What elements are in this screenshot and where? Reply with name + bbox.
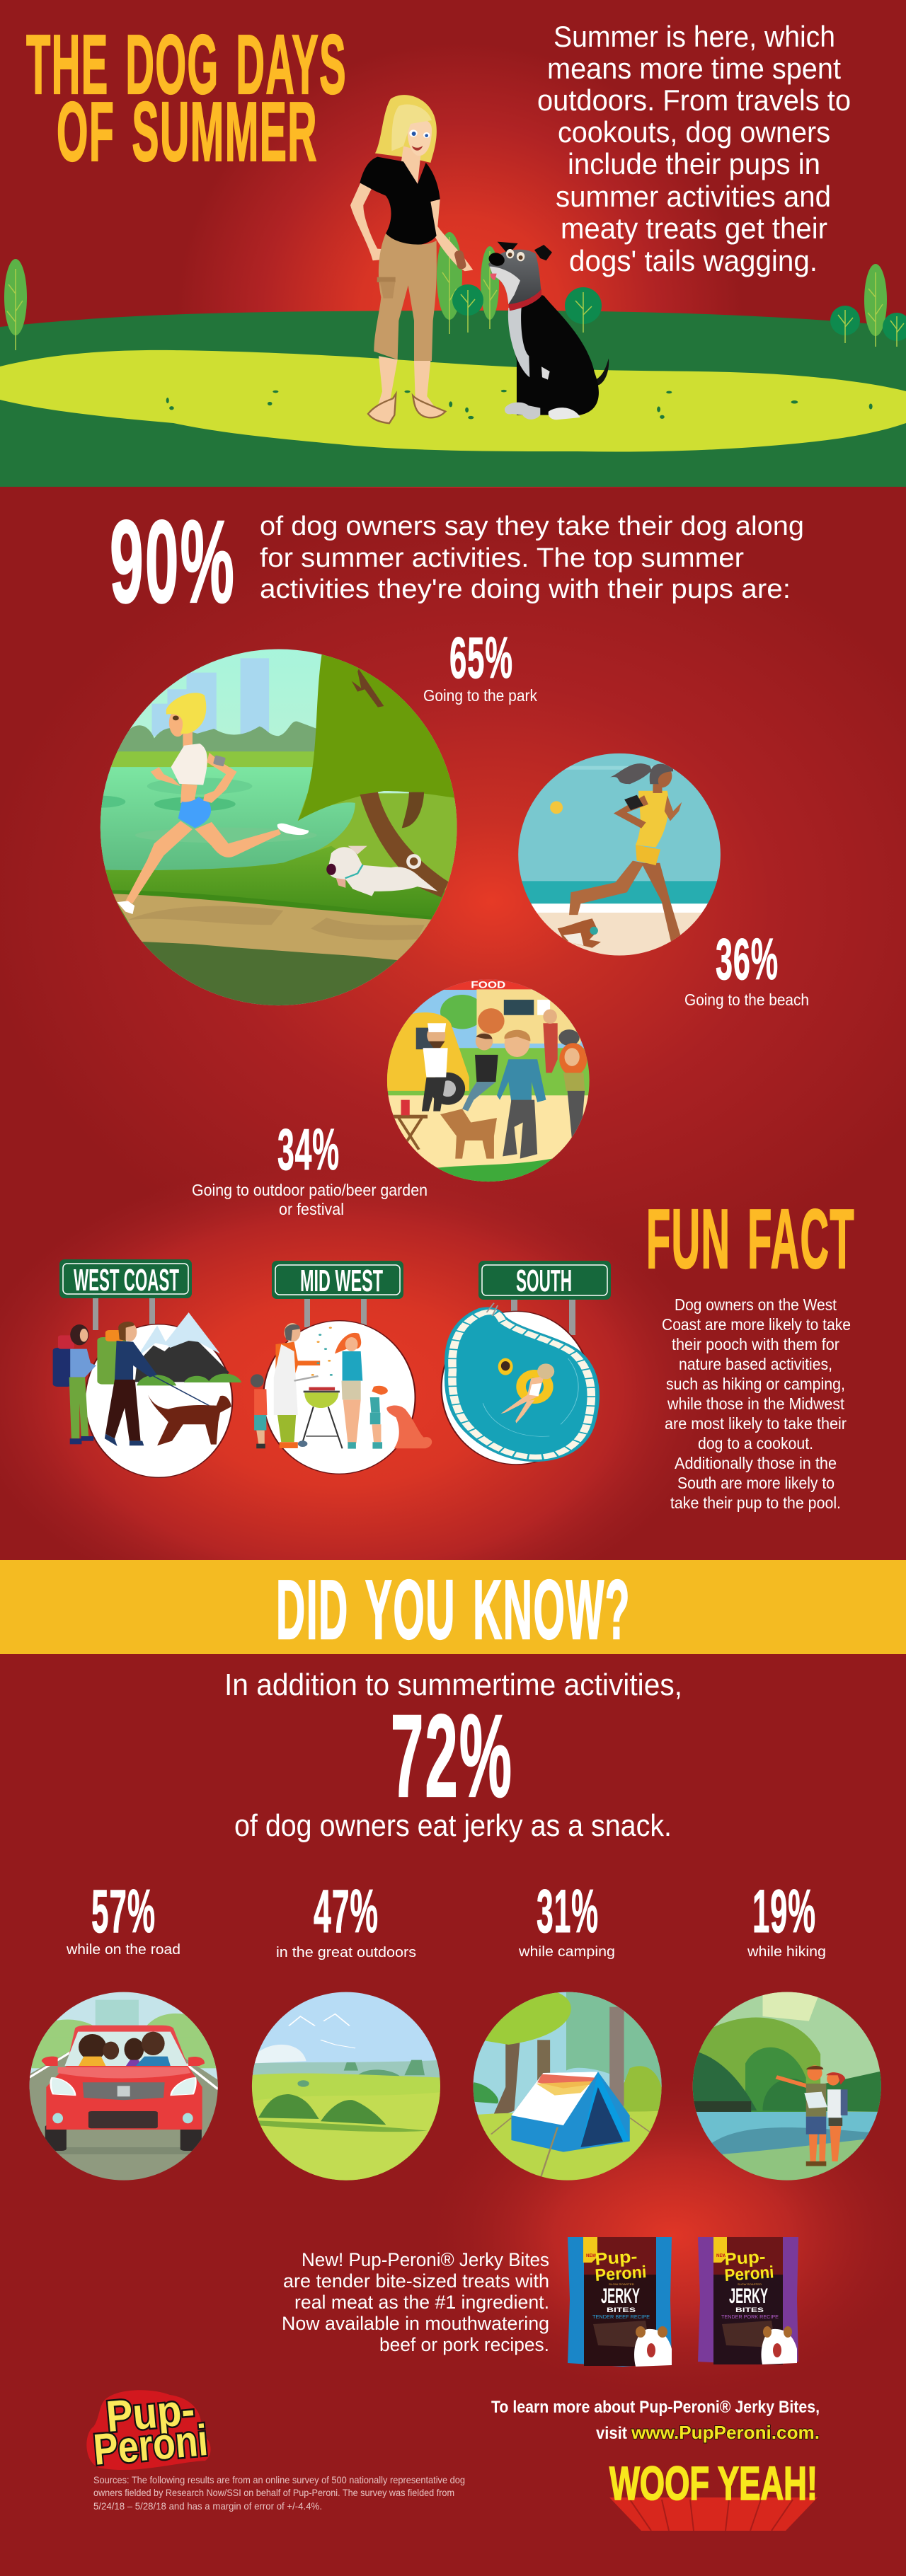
dark green hill: [0, 311, 906, 487]
90 percent statistic: 90%: [110, 497, 236, 628]
call to action: [491, 2398, 820, 2443]
product: pork jerky bag: [698, 2237, 798, 2364]
panel: hero scene: [0, 95, 906, 487]
illustration: park: [101, 649, 457, 1006]
jerky statistic: 72%: [391, 1691, 513, 1822]
stat: park: [423, 625, 537, 705]
sign: south: [478, 1261, 611, 1335]
product: beef jerky bag: JERKY: [601, 2285, 640, 2308]
illustration: camping tent: [468, 1990, 670, 2181]
call to action: To learn more about Pup-Peroni® Jerky Bites,: [491, 2398, 820, 2417]
intro text: Summer is here, which: [554, 20, 835, 53]
infographic canvas: THE DOG DAYS: [26, 18, 347, 112]
intro text: include their pups in: [568, 147, 820, 180]
stat: on the road: [66, 1878, 180, 1958]
stat: festival: [192, 1116, 428, 1218]
sign: west coast: [59, 1259, 192, 1330]
product: beef jerky bag: Pup-: [595, 2247, 638, 2269]
fun fact text: dog to a cookout.: [698, 1434, 813, 1452]
sources footnote: [93, 2474, 465, 2512]
illustration: southern pool: [442, 1303, 598, 1465]
logo: Pup-Peroni: Peroni: [91, 2416, 210, 2475]
logo: Pup-Peroni: [86, 2384, 211, 2475]
stat: on the road: while on the road: [66, 1942, 180, 1958]
bottom text: new product: are tender bite-sized treats with: [283, 2270, 549, 2292]
stat: hiking: while hiking: [747, 1944, 826, 1960]
bottom text: new product: real meat as the #1 ingredient.: [294, 2292, 549, 2313]
stat: great outdoors: 47%: [314, 1878, 379, 1946]
dog: [487, 242, 609, 420]
product: pork jerky bag: JERKY: [729, 2285, 768, 2308]
product: beef jerky bag: SLOW ROASTED: [609, 2282, 634, 2286]
intro text: means more time spent: [547, 52, 841, 85]
product: pork jerky bag: NEW!: [716, 2254, 728, 2258]
product: beef jerky bag: BITES: [607, 2306, 636, 2314]
product: beef jerky bag: Peroni: [595, 2263, 647, 2285]
sign: south: SOUTH: [516, 1264, 572, 1298]
stat: camping: [518, 1878, 615, 1960]
bottom text: new product: [282, 2249, 549, 2355]
stat: camping: 31%: [537, 1878, 599, 1946]
fun fact text: Dog owners on the West: [675, 1295, 837, 1314]
intro text: meaty treats get their: [561, 212, 827, 245]
title: [26, 18, 347, 179]
jerky statistic: of dog owners eat jerky as a snack.: [234, 1808, 672, 1843]
stat: beach: [684, 926, 809, 1009]
jerky statistic: In addition to summertime activities,: [224, 1668, 682, 1702]
intro text: outdoors. From travels to: [537, 83, 851, 117]
stat: great outdoors: [276, 1878, 416, 1960]
illustration: beach: [518, 753, 721, 955]
bottom text: new product: New! Pup-Peroni® Jerky Bites: [302, 2249, 549, 2270]
fun fact text: [662, 1295, 851, 1512]
stat: hiking: 19%: [752, 1878, 816, 1946]
intro text: cookouts, dog owners: [558, 115, 830, 149]
fun fact text: take their pup to the pool.: [670, 1494, 841, 1512]
intro text: dogs' tails wagging.: [569, 244, 818, 277]
stat: beach: Going to the beach: [684, 990, 809, 1009]
90 percent description: of dog owners say they take their dog along: [260, 512, 804, 541]
fun fact text: are most likely to take their: [665, 1414, 847, 1433]
illustration: west coast hikers: [53, 1312, 241, 1477]
trees: [4, 232, 906, 350]
product: pork jerky bag: BITES: [735, 2306, 764, 2314]
illustration: great outdoors landscape: [248, 1990, 445, 2181]
sources footnote: 5/24/18 – 5/28/18 and has a margin of error of +/-4.4%.: [93, 2500, 322, 2512]
logo: Pup-Peroni: Pup-: [104, 2385, 197, 2442]
woman: [350, 95, 473, 423]
illustration: outdoor festival: [382, 974, 595, 1186]
fun fact text: Additionally those in the: [675, 1454, 837, 1472]
product: beef jerky bag: TENDER BEEF RECIPE: [592, 2315, 650, 2320]
stat: festival: Going to outdoor patio/beer garden: [192, 1181, 428, 1199]
fun fact text: South are more likely to: [677, 1474, 835, 1492]
intro text: [537, 20, 851, 277]
stat: festival: or festival: [279, 1200, 344, 1218]
90 percent description: [260, 512, 804, 604]
woof yeah slogan: [609, 2457, 818, 2531]
bottom text: new product: Now available in mouthwatering: [282, 2313, 549, 2334]
product: beef jerky bag: [568, 2237, 672, 2367]
jerky statistic: [224, 1668, 682, 1843]
product: pork jerky bag: TENDER PORK RECIPE: [721, 2315, 779, 2320]
stat: beach: 36%: [716, 926, 779, 992]
stat: hiking: [747, 1878, 826, 1960]
illustration: midwest cookout: [251, 1321, 432, 1474]
fun fact text: Coast are more likely to take: [662, 1315, 851, 1334]
stat: great outdoors: in the great outdoors: [276, 1945, 416, 1960]
90 percent description: for summer activities. The top summer: [260, 543, 744, 573]
sign: mid west: [272, 1261, 403, 1327]
title: OF SUMMER: [57, 85, 318, 179]
stat: festival: 34%: [277, 1116, 340, 1182]
bottom text: new product: beef or pork recipes.: [379, 2334, 549, 2355]
intro text: summer activities and: [556, 180, 831, 213]
banner: did you know: [0, 1560, 906, 1657]
product: pork jerky bag: Peroni: [724, 2263, 774, 2285]
stat: park: Going to the park: [423, 686, 537, 705]
yellow-green clearing: [0, 350, 906, 451]
sign: mid west: MID WEST: [300, 1264, 383, 1298]
illustration: outdoor festival: FOOD: [471, 979, 505, 990]
illustration: hikers by lake: [687, 1990, 890, 2181]
fun fact text: while those in the Midwest: [667, 1394, 845, 1413]
grass flecks: [166, 390, 873, 419]
stat: park: 65%: [449, 625, 513, 691]
sources footnote: Sources: The following results are from an online survey of 500 nationally representative dog: [93, 2474, 465, 2485]
stat: camping: while camping: [518, 1944, 615, 1960]
sign: west coast: WEST COAST: [74, 1263, 179, 1298]
sources footnote: owners fielded by Research Now/SSI on behalf of Pup-Peroni. The survey was fielded from: [93, 2487, 454, 2498]
fun fact text: nature based activities,: [679, 1355, 832, 1373]
call to action: www.PupPeroni.com.: [631, 2422, 820, 2443]
illustration: family in car: [23, 1990, 225, 2181]
product: beef jerky bag: NEW!: [586, 2254, 597, 2258]
product: pork jerky bag: Pup-: [724, 2247, 766, 2269]
fun fact text: their pooch with them for: [672, 1335, 839, 1353]
fun fact text: such as hiking or camping,: [666, 1375, 845, 1393]
90 percent description: activities they're doing with their pups are:: [260, 574, 791, 604]
product: pork jerky bag: SLOW ROASTED: [738, 2282, 762, 2286]
call to action: visit: [596, 2424, 627, 2443]
stat: on the road: 57%: [91, 1878, 156, 1946]
